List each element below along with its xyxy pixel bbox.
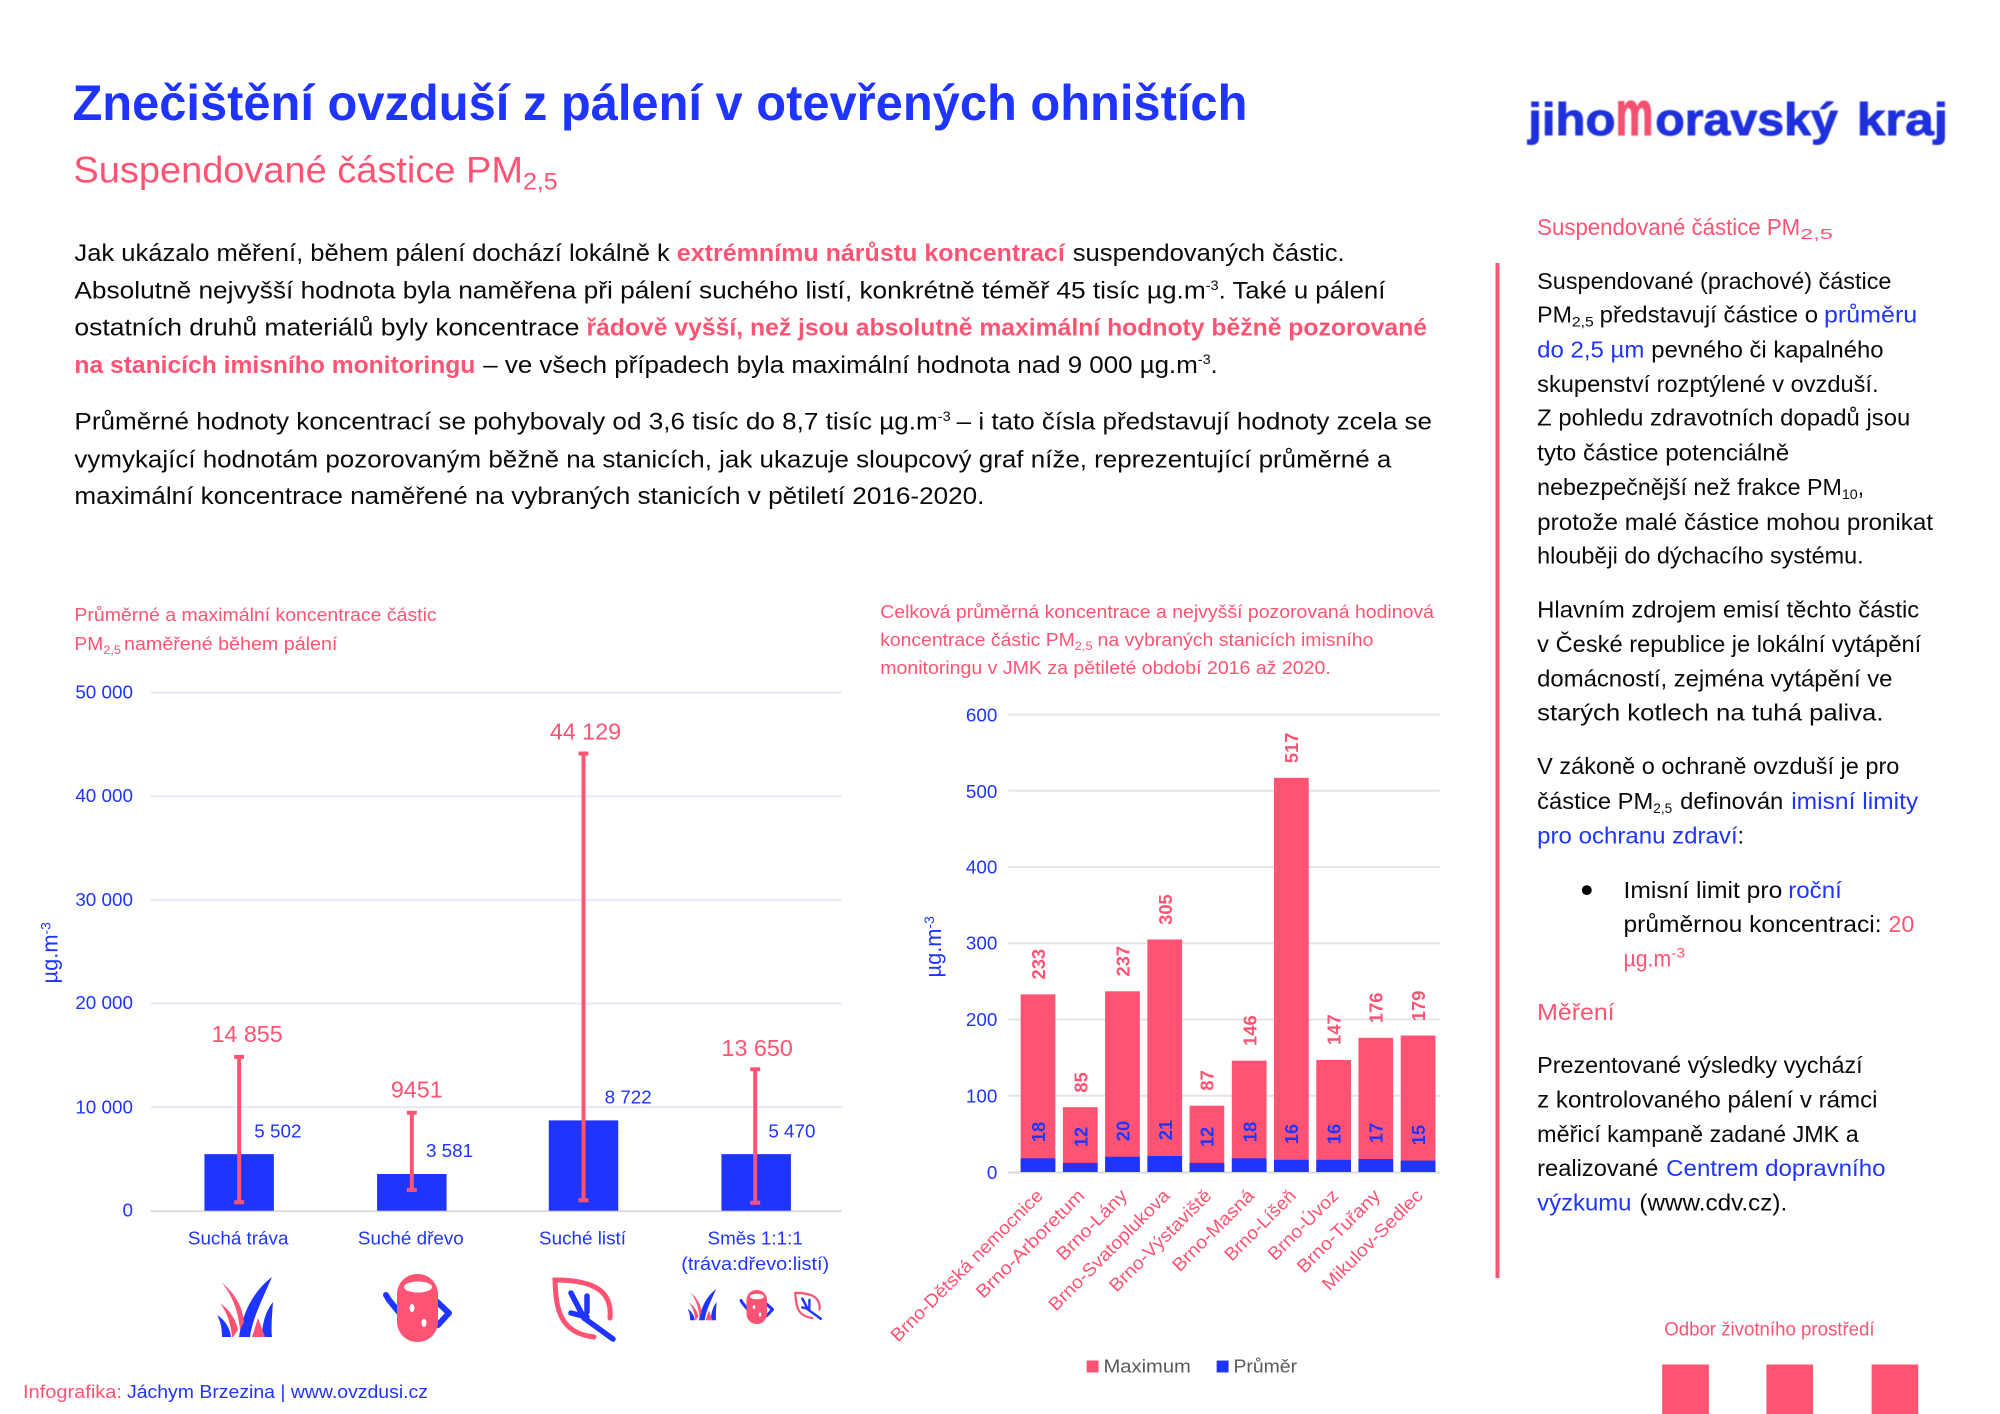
text block: measurement: Prezentované výsledky vychází	[1537, 1052, 1863, 1078]
y axis: stations chart	[921, 704, 1440, 1183]
text block: intro paragraph 2: -3	[938, 408, 951, 424]
text block: measurement	[1537, 1052, 1886, 1216]
y axis: burning chart: 20 000	[75, 992, 133, 1013]
data labels: average: 16	[1281, 1124, 1302, 1144]
legend: Průměr	[1234, 1355, 1297, 1376]
text block: definition: hlouběji do dýchacího systému.	[1537, 543, 1864, 569]
text block: sources	[1537, 596, 1922, 725]
station labels	[886, 1184, 1427, 1346]
y axis: burning chart: -3	[38, 922, 54, 934]
data labels: average: 21	[1155, 1120, 1176, 1140]
text block: legal limits: částice PM	[1537, 788, 1653, 814]
chart heading: stations	[880, 601, 1435, 678]
logo: jihomoravský kraj: oravský	[1655, 94, 1839, 145]
bars: average	[1021, 1156, 1435, 1172]
logo: jihomoravský kraj: m	[1616, 78, 1653, 149]
bullet: annual limit	[1582, 877, 1914, 972]
y axis: burning chart: 50 000	[75, 682, 133, 703]
text block: intro paragraph 1: na stanicích imisního monitoringu	[74, 352, 475, 379]
station labels: Brno-Svatoplukova	[1044, 1184, 1174, 1315]
text block: definition: PM	[1537, 302, 1572, 328]
text block: intro paragraph 1: -3	[1198, 351, 1211, 367]
text block: measurement: Centrem dopravního	[1666, 1155, 1886, 1181]
data labels: maximum: 305	[1155, 894, 1176, 925]
text block: legal limits	[1537, 753, 1919, 849]
station labels: Brno-Arboretum	[971, 1185, 1088, 1302]
labels: average values	[254, 1087, 815, 1161]
text block: intro paragraph 2	[74, 408, 1432, 510]
category labels: Suché dřevo	[358, 1227, 464, 1248]
chart heading: burning concentrations: PM	[74, 633, 103, 654]
labels: maximum values: 14 855	[211, 1021, 283, 1047]
bars: maximum	[1021, 778, 1435, 1172]
labels: average values: 5 502	[254, 1120, 301, 1141]
station labels: Brno-Výstaviště	[1105, 1185, 1216, 1296]
text block: intro paragraph 2: maximální koncentrace naměřené na vybraných stanicích v pětiletí 2016-2020.	[74, 483, 984, 510]
icon: leaf	[555, 1280, 613, 1339]
text block: intro paragraph 2: – i tato čísla představují hodnoty zcela se	[957, 409, 1432, 436]
y axis: burning chart: 0	[122, 1200, 133, 1221]
text block: intro paragraph 2: vymykající hodnotám pozorovaným běžně na stanicích, jak ukazuje sloupcový graf níže, reprezentující průměrné a	[74, 446, 1392, 473]
data labels: maximum: 237	[1112, 946, 1133, 976]
station labels: Brno-Masná	[1168, 1184, 1259, 1275]
icon: small wood log	[741, 1290, 773, 1324]
chart heading: stations: koncentrace částic PM	[880, 629, 1075, 650]
y axis: stations chart: 300	[966, 933, 997, 954]
data labels: maximum: 147	[1324, 1014, 1345, 1045]
text block: definition: skupenství rozptýlené v ovzduší.	[1537, 371, 1879, 397]
data labels: average: 18	[1028, 1122, 1049, 1142]
bullet: annual limit: Imisní limit pro	[1624, 877, 1782, 903]
subtitle: 2,5	[523, 169, 558, 196]
chart heading: stations: na vybraných stanicích imisního	[1098, 629, 1373, 650]
text block: definition: Z pohledu zdravotních dopadů jsou	[1537, 405, 1910, 431]
text block: intro paragraph 1: řádově vyšší, než jsou absolutně maximální hodnoty běžně pozorované	[586, 314, 1427, 341]
heading: measurement: Měření	[1537, 999, 1615, 1025]
text block: intro paragraph 1: – ve všech případech byla maximální hodnota nad 9 000 µg.m	[483, 352, 1198, 379]
text block: intro paragraph 1	[74, 240, 1427, 379]
text block: definition: tyto částice potenciálně	[1537, 439, 1789, 465]
y axis: stations chart: 600	[966, 704, 997, 725]
data labels: maximum: 146	[1239, 1015, 1260, 1046]
text block: sources: domácností, zejména vytápění ve	[1537, 666, 1892, 692]
text block: definition: Suspendované (prachové) částice	[1537, 268, 1891, 294]
data labels: average	[1028, 1120, 1429, 1147]
category labels: (tráva:dřevo:listí)	[681, 1253, 829, 1274]
y axis: stations chart: 0	[987, 1162, 997, 1183]
text block: intro paragraph 2: Průměrné hodnoty koncentrací se pohybovaly od 3,6 tisíc do 8,7 tisíc µg.m	[74, 409, 938, 436]
labels: average values: 8 722	[605, 1087, 652, 1108]
chart heading: burning concentrations: naměřené během pálení	[124, 633, 337, 654]
y axis: burning chart: µg.m	[38, 934, 63, 983]
y axis: burning chart: 10 000	[75, 1096, 133, 1117]
text block: legal limits: pro ochranu zdraví	[1537, 823, 1738, 849]
station labels: Brno-Lány	[1052, 1184, 1132, 1264]
labels: maximum values	[211, 718, 793, 1103]
data labels: maximum: 179	[1408, 991, 1429, 1021]
logo: jihomoravský kraj: kraj	[1857, 94, 1948, 145]
labels: maximum values: 44 129	[550, 718, 621, 744]
data labels: maximum: 233	[1028, 949, 1049, 979]
text block: definition	[1537, 268, 1934, 569]
icon: small leaf	[795, 1293, 821, 1319]
text block: definition: protože malé částice mohou pronikat	[1537, 509, 1934, 535]
text block: measurement: měřicí kampaně zadané JMK a	[1537, 1121, 1859, 1147]
bullet: annual limit: 20	[1888, 911, 1914, 937]
text block: intro paragraph 1: suspendovaných částic.	[1073, 240, 1345, 267]
chart heading: burning concentrations: 2,5	[103, 643, 121, 657]
text block: sources: starých kotlech na tuhá paliva.	[1537, 699, 1884, 725]
decorative pink blocks	[1662, 1365, 1918, 1414]
data labels: average: 12	[1071, 1127, 1092, 1147]
text block: definition: do 2,5 µm	[1537, 336, 1644, 362]
text block: intro paragraph 1: . Také u pálení	[1219, 278, 1386, 305]
text block: measurement: realizované	[1537, 1155, 1658, 1181]
y axis: burning chart: 40 000	[75, 785, 133, 806]
data labels: maximum	[1028, 733, 1429, 1093]
data labels: average: 15	[1408, 1125, 1429, 1145]
bullet: annual limit: -3	[1671, 945, 1685, 961]
text block: sources: v České republice je lokální vytápění	[1537, 631, 1922, 657]
station labels: Mikulov-Sedlec	[1317, 1185, 1427, 1294]
station labels: Brno-Úvoz	[1263, 1185, 1343, 1264]
data labels: average: 18	[1239, 1122, 1260, 1142]
text block: legal limits: definován	[1680, 788, 1783, 814]
labels: average values: 5 470	[768, 1120, 815, 1141]
text block: legal limits: imisní limity	[1791, 788, 1919, 814]
text block: legal limits: :	[1738, 823, 1744, 849]
text block: definition: 10	[1842, 486, 1858, 502]
category labels: Suchá tráva	[188, 1227, 289, 1248]
data labels: average: 16	[1324, 1124, 1345, 1144]
y axis: burning chart	[38, 682, 842, 1221]
text block: intro paragraph 1: Absolutně nejvyšší hodnota byla naměřena při pálení suchého listí, konkrétně téměř 45 tisíc µg.m	[74, 278, 1206, 305]
labels: maximum values: 9451	[391, 1077, 443, 1103]
bullet: annual limit: průměrnou koncentraci:	[1624, 911, 1882, 937]
y axis: burning chart: 30 000	[75, 889, 133, 910]
data labels: maximum: 85	[1071, 1072, 1092, 1093]
data labels: average: 17	[1365, 1123, 1386, 1143]
legend: Maximum	[1104, 1355, 1191, 1376]
icon: wood log	[386, 1274, 449, 1342]
panel: stations chart	[880, 601, 1440, 1376]
text block: intro paragraph 1: -3	[1206, 277, 1219, 293]
text block: intro paragraph 1: Jak ukázalo měření, během pálení dochází lokálně k	[74, 240, 671, 267]
text block: definition: 2,5	[1572, 313, 1594, 329]
y axis: stations chart: µg.m	[921, 929, 946, 977]
y axis: stations chart: 200	[966, 1009, 997, 1030]
y axis: stations chart: 100	[966, 1086, 997, 1107]
data labels: maximum: 517	[1281, 733, 1302, 763]
logo: jihomoravský kraj	[1527, 78, 1948, 149]
chart heading: burning concentrations: Průměrné a maximální koncentrace částic	[74, 604, 437, 625]
sidebar heading: Suspendované částice PM	[1537, 214, 1800, 240]
category labels: Suché listí	[539, 1227, 627, 1248]
bullet: annual limit: µg.m	[1624, 946, 1671, 972]
text block: measurement: výzkumu	[1537, 1190, 1631, 1216]
text block: legal limits: 2,5	[1653, 800, 1672, 816]
subtitle: Suspendované částice PM	[73, 150, 523, 191]
icon: grass	[217, 1277, 273, 1337]
title: Znečištění ovzduší z pálení v otevřených ohništích	[72, 75, 1247, 131]
data labels: maximum: 87	[1197, 1070, 1218, 1091]
panel: sidebar	[1496, 214, 1934, 1278]
station labels: Brno-Líšeň	[1220, 1185, 1300, 1265]
chart heading: stations: 2,5	[1075, 639, 1093, 653]
text block: intro paragraph 1: extrémnímu nárůstu koncentrací	[677, 240, 1066, 267]
text block: sources: Hlavním zdrojem emisí těchto částic	[1537, 596, 1919, 622]
text block: legal limits: V zákoně o ochraně ovzduší je pro	[1537, 753, 1899, 779]
whiskers: minimum to maximum range	[234, 754, 760, 1203]
panel: burning chart	[38, 604, 842, 1342]
data labels: maximum: 176	[1365, 993, 1386, 1023]
station labels: Brno-Dětská nemocnice	[886, 1185, 1047, 1346]
chart heading: stations: monitoringu v JMK za pětileté období 2016 až 2020.	[880, 657, 1331, 678]
chart heading: stations: Celková průměrná koncentrace a nejvyšší pozorovaná hodinová	[880, 601, 1435, 622]
labels: maximum values: 13 650	[722, 1035, 793, 1061]
text block: measurement: (www.cdv.cz).	[1639, 1190, 1787, 1216]
chart heading: burning concentrations	[74, 604, 437, 657]
text block: definition: průměru	[1824, 302, 1917, 328]
credit: Jáchym Brzezina | www.ovzdusi.cz	[127, 1381, 428, 1402]
labels: average values: 3 581	[426, 1140, 473, 1161]
y axis: stations chart: 400	[966, 856, 997, 877]
icon: small grass	[688, 1289, 717, 1320]
station labels: Brno-Tuřany	[1292, 1184, 1385, 1277]
department label: Odbor životního prostředí	[1664, 1319, 1875, 1341]
logo: jihomoravský kraj: jiho	[1527, 94, 1616, 145]
data labels: average: 20	[1112, 1121, 1133, 1141]
sidebar heading: 2,5	[1800, 227, 1833, 243]
text block: intro paragraph 1: .	[1211, 352, 1218, 379]
sidebar rule	[1496, 263, 1499, 1278]
y axis: stations chart: -3	[921, 916, 937, 929]
bars: average burning concentration	[204, 1120, 791, 1211]
text block: definition: nebezpečnější než frakce PM	[1537, 474, 1842, 500]
text block: intro paragraph 1: ostatních druhů materiálů byly koncentrace	[74, 314, 580, 341]
y axis: stations chart: 500	[966, 781, 997, 802]
credit: Infografika:	[23, 1381, 122, 1402]
data labels: average: 12	[1197, 1127, 1218, 1147]
text block: definition: pevného či kapalného	[1651, 336, 1884, 362]
category labels	[188, 1227, 829, 1274]
bullet: annual limit: roční	[1788, 877, 1843, 903]
text block: definition: představují částice o	[1600, 302, 1818, 328]
legend	[1087, 1355, 1297, 1376]
category labels: Směs 1:1:1	[708, 1227, 803, 1248]
text block: measurement: z kontrolovaného pálení v rámci	[1537, 1086, 1878, 1112]
text block: definition: ,	[1858, 474, 1864, 500]
